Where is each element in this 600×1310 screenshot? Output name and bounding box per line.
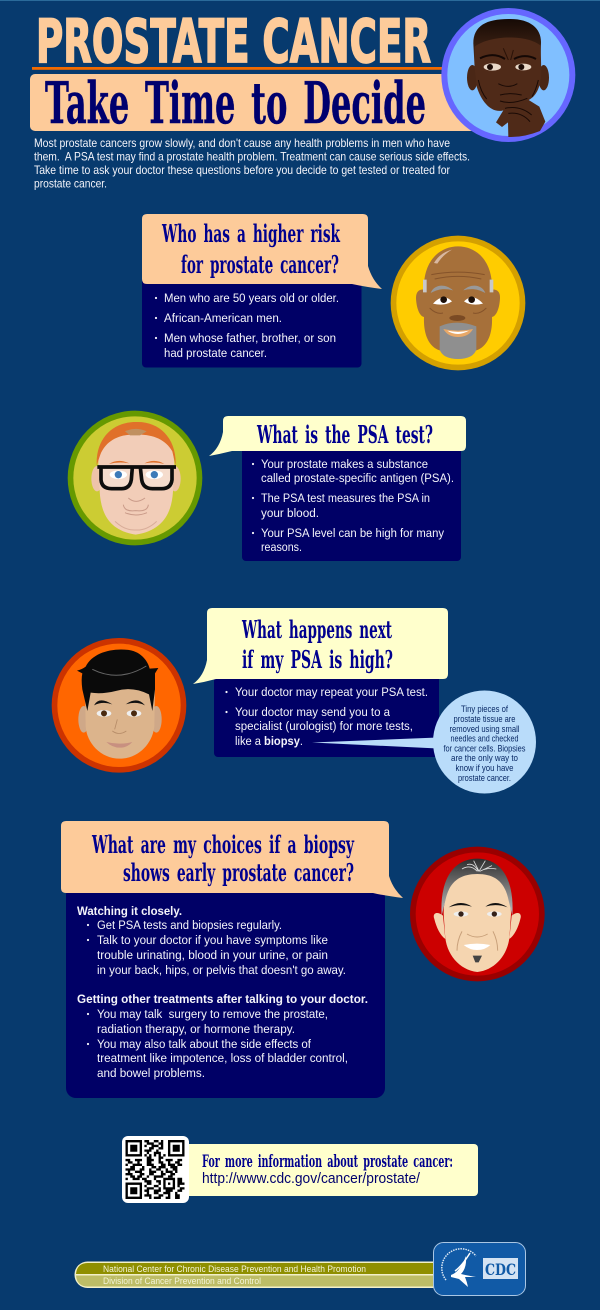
header [30,7,575,142]
intro text: prostate cancer. [34,178,107,190]
panel: who has a higher risk: for prostate cancer? [181,250,339,279]
text: watching it closely: Get PSA tests and biopsies regularly. [97,918,282,932]
answer box [142,278,362,368]
icon: man with slicked grey hair [410,847,545,981]
URL: http://www.cdc.gov/cancer/prostate/ [202,1171,421,1187]
CDC logo [434,1242,526,1296]
question heading: Who has a higher risk [161,219,341,248]
bullet list: African-American men. [164,311,282,325]
footer: Division of Cancer Prevention and Control [103,1276,261,1286]
text: other treatments: You may also talk about the side effects of [97,1037,312,1051]
callout: biopsy definition: Tiny pieces of [461,704,508,714]
text: watching it closely: trouble urinating, blood in your urine, or pain [97,948,328,962]
intro text: Most prostate cancers grow slowly, and don't cause any health problems in men who have [34,137,450,150]
bullet list: reasons. [261,540,302,554]
bullet list: Your doctor may repeat your PSA test. [235,685,428,699]
bullet list: like a biopsy. [235,734,303,748]
answer box [66,885,385,1098]
intro text: them. A PSA test may find a prostate health problem. Treatment can cause serious side effects. [34,150,470,164]
callout: biopsy definition: know if you have [456,763,514,773]
speech bubble [193,608,448,684]
icon: man with black hair [52,638,186,773]
bullet list: The PSA test measures the PSA in [261,491,430,505]
bullet list [155,291,339,360]
question heading: What happens next [241,615,392,644]
bullet list: your blood. [261,506,319,520]
icon: thinking man portrait [441,8,575,142]
panel: what are my choices: shows early prostate cancer? [123,858,354,887]
subtitle banner [30,74,480,131]
text: other treatments: and bowel problems. [97,1066,205,1080]
panel: more information [122,1136,478,1203]
question heading: What is the PSA test? [256,420,433,449]
panel: what are my choices [61,821,545,1098]
footer bar [74,1262,446,1288]
callout: biopsy definition: prostate cancer. [458,773,511,783]
footer [74,1242,526,1296]
panel: what happens next [52,608,536,794]
text: other treatments: treatment like impotence, loss of bladder control, [97,1051,348,1065]
orange rule [32,67,447,70]
QR code [122,1136,189,1203]
bullet list: had prostate cancer. [164,346,267,360]
callout: biopsy definition: for cancer cells. Biopsies [444,744,526,754]
answer box [242,445,461,561]
bullet list: Men who are 50 years old or older. [164,291,339,305]
text: watching it closely: in your back, hips, or pelvis that doesn't go away. [97,963,346,977]
intro text: Take time to ask your doctor these questions before you decide to get tested or treated for [34,164,450,177]
panel: who has a higher risk [142,214,525,370]
speech bubble [142,214,382,289]
callout: biopsy definition: prostate tissue are [454,714,516,724]
CDC logo: CDC [485,1260,516,1279]
bullet list: called prostate-specific antigen (PSA). [261,471,454,485]
bullet list: specialist (urologist) for more tests, [235,719,413,733]
callout: biopsy definition: are the only way to [451,753,518,763]
icon: older bald man with grey goatee [391,236,525,370]
icon: man with glasses and red hair [68,411,202,545]
bullet list: Your PSA level can be high for many [261,526,445,540]
bullet list: Your doctor may send you to a [235,705,390,719]
bullet list [225,685,428,748]
text: watching it closely: Watching it closely. [77,904,182,918]
bullet list [252,457,454,554]
speech bubble [61,821,403,898]
agency names: National Center for Chronic Disease Prevention and Health Promotion [103,1264,366,1274]
text: watching it closely: Talk to your doctor if you have symptoms like [97,933,328,947]
text: other treatments: Getting other treatments after talking to your doctor. [77,992,368,1006]
answer box [214,672,439,757]
callout: biopsy definition: needles and checked [450,734,518,744]
text: other treatments [77,992,368,1080]
callout: biopsy definition [312,690,536,794]
panel: what is the PSA test [68,411,466,561]
speech bubble [209,416,466,456]
text: other treatments: You may talk surgery to remove the prostate, [97,1007,328,1021]
text: watching it closely [77,904,346,977]
bullet list: Men whose father, brother, or son [164,331,336,345]
panel: what happens next: if my PSA is high? [242,645,393,674]
info banner [170,1144,478,1196]
bullet list: Your prostate makes a substance [261,457,428,471]
question heading: What are my choices if a biopsy [91,830,354,859]
text: other treatments: radiation therapy, or hormone therapy. [97,1022,295,1036]
intro text [34,137,470,190]
callout: biopsy definition: removed using small [450,724,520,734]
